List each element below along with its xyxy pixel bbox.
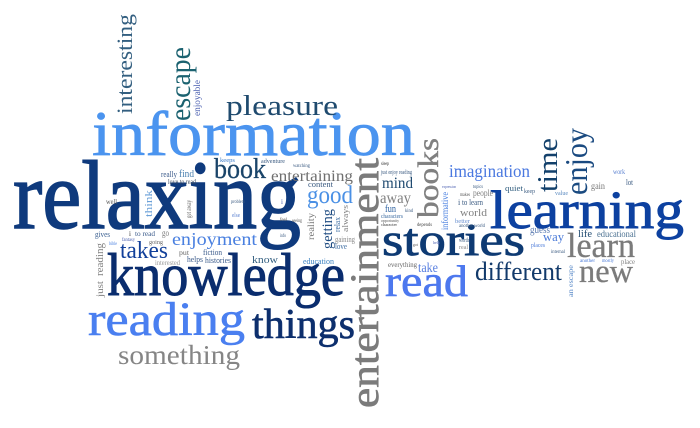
small words: left cluster: find	[179, 168, 194, 180]
word: different: different	[475, 257, 563, 286]
small words: left cluster: go	[162, 228, 169, 238]
word: enjoyment: enjoyment	[172, 229, 257, 249]
word: enjoy: enjoy	[558, 128, 594, 195]
small words: left cluster: get away	[185, 200, 193, 218]
small words: left cluster: reading	[95, 243, 106, 276]
word: entertainment: entertainment	[342, 158, 387, 408]
small words: left cluster: to read	[135, 230, 156, 238]
small words: right cluster: guess	[530, 225, 550, 236]
small words: left cluster: put	[179, 249, 189, 257]
word: pleasure: pleasure	[226, 90, 338, 122]
word: imagination: imagination	[449, 161, 530, 181]
small words: right cluster: mostly	[602, 259, 614, 264]
small words: centre cluster	[220, 158, 355, 266]
word: enjoyable: enjoyable	[192, 80, 202, 116]
small words: mid-right cluster: kind	[405, 209, 413, 214]
word: knowledge: knowledge	[107, 242, 345, 308]
small words: right cluster: life	[578, 229, 593, 240]
small words: right cluster: gain	[591, 181, 605, 191]
small words: mid-right cluster: depends	[417, 223, 432, 228]
small words: centre cluster: always	[341, 205, 350, 232]
small words: centre cluster: seeing	[292, 219, 302, 224]
small words: left cluster: think	[143, 189, 155, 217]
small words: mid-right cluster: another world	[459, 224, 485, 229]
word: learning: learning	[490, 180, 684, 240]
small words: right cluster: work	[613, 168, 625, 176]
small words: left cluster: well	[106, 198, 117, 206]
small words: centre cluster: relax	[333, 217, 342, 232]
small words: centre cluster: else	[232, 213, 240, 219]
word: getting: getting	[320, 209, 336, 249]
small words: mid-right cluster: take	[418, 261, 438, 276]
small words: mid-right cluster: characters	[381, 214, 404, 220]
small words: mid-right cluster: fun	[385, 204, 396, 215]
small words: centre cluster: info	[280, 234, 286, 239]
small words: mid-right cluster: got	[413, 242, 419, 247]
small words: mid-right cluster: expression	[442, 184, 456, 189]
small words: right cluster: value	[555, 191, 568, 197]
small words: mid-right cluster: better	[455, 219, 470, 225]
small words: centre cluster: problem	[231, 200, 245, 205]
word: stories: stories	[382, 214, 525, 265]
small words: mid-right cluster: everything	[388, 261, 417, 269]
small words: mid-right cluster: informative	[440, 192, 450, 230]
small words: mid-right cluster: world	[460, 207, 488, 219]
small words: mid-right cluster: help	[433, 240, 440, 245]
word: takes: takes	[120, 238, 168, 264]
small words: right cluster	[505, 168, 636, 297]
small words: right cluster: keep	[524, 189, 535, 195]
small words: left cluster: fiction	[203, 248, 222, 257]
small words: left cluster: helps	[187, 255, 203, 264]
small words: right cluster: educational	[597, 229, 636, 239]
small words: centre cluster: content	[308, 180, 334, 189]
small words: left cluster: fantasy	[122, 238, 135, 243]
small words: right cluster: way	[543, 229, 564, 244]
small words: centre cluster: watching	[293, 164, 310, 169]
small words: mid-right cluster: sleep	[381, 162, 389, 167]
word: good: good	[307, 182, 353, 209]
word: relaxing: relaxing	[13, 142, 301, 250]
small words: mid-right cluster: character	[381, 222, 398, 227]
small words: centre cluster: gaining	[335, 235, 355, 244]
small words: left cluster: interested	[155, 259, 180, 267]
small words: left cluster: just	[95, 280, 105, 298]
small words: centre cluster: love	[335, 242, 347, 251]
word: time: time	[533, 138, 564, 192]
small words: centre cluster: i	[281, 198, 283, 206]
small words: mid-right cluster: worth	[459, 238, 469, 244]
small words: left cluster: really	[161, 170, 177, 179]
small words: mid-right cluster: opportunity	[381, 218, 399, 223]
word: read: read	[385, 257, 468, 306]
small words: centre cluster: reality	[306, 212, 316, 240]
word: away: away	[380, 190, 411, 207]
small words: right cluster: an escape	[567, 265, 575, 297]
small words: right cluster: place	[621, 258, 635, 266]
small words: mid-right cluster: people	[473, 188, 493, 198]
small words: right cluster: quiet	[505, 184, 524, 193]
small words: mid-right cluster: topics	[473, 185, 483, 190]
small words: centre cluster: adventure	[261, 159, 285, 165]
word: learn: learn	[567, 226, 635, 265]
word: mind: mind	[382, 175, 413, 192]
small words: left cluster: going	[149, 240, 163, 246]
small words: right cluster: internal	[551, 250, 566, 255]
small words: mid-right cluster: i	[458, 198, 461, 207]
small words: mid-right cluster: makes	[460, 193, 470, 198]
word: entertaining: entertaining	[271, 168, 353, 185]
small words: right cluster: another	[580, 259, 595, 264]
small words: left cluster: love to read	[168, 178, 196, 186]
word: interesting: interesting	[112, 14, 137, 114]
small words: mid-right cluster	[380, 162, 493, 276]
small words: centre cluster: know	[252, 254, 278, 266]
word: reading: reading	[88, 293, 245, 346]
word: escape: escape	[164, 47, 197, 121]
small words: mid-right cluster: just enjoy reading	[380, 170, 412, 176]
small words: centre cluster: keeps	[220, 158, 236, 164]
small words: centre cluster: feel	[280, 218, 288, 223]
word: information: information	[92, 98, 415, 169]
word: book: book	[214, 154, 266, 185]
small words: left cluster: i	[129, 230, 131, 238]
word: something: something	[118, 340, 240, 370]
word: new: new	[579, 254, 633, 290]
small words: left cluster	[95, 168, 231, 298]
small words: mid-right cluster: to learn	[462, 198, 483, 207]
small words: right cluster: lot	[626, 178, 634, 187]
small words: left cluster: histories	[205, 256, 231, 265]
small words: centre cluster: education	[303, 257, 334, 266]
small words: mid-right cluster: real	[459, 245, 468, 251]
small words: left cluster: gives	[95, 230, 110, 239]
small words: right cluster: places	[531, 243, 546, 249]
small words: left cluster: bible	[109, 242, 118, 247]
word: books: books	[412, 138, 445, 218]
word: things: things	[252, 302, 355, 348]
